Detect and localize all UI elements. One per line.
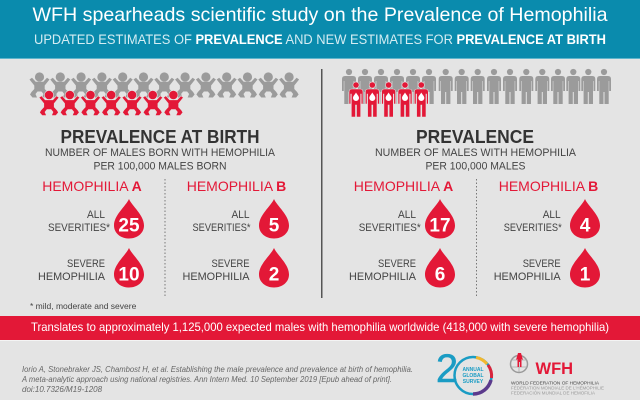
logo: WFH: FÉDÉRATION MONDIALE DE L'HÉMOPHILIE [511,384,604,392]
drop: 1 [570,248,600,288]
icons: people row [342,69,611,117]
icons: babies row [30,72,299,116]
red banner: Translates to approximately 1,125,000 expected males with hemophilia worldwide (418,000 with severe hemophilia) [31,320,609,334]
drop: 25 [114,199,144,238]
logo: WFH: WORLD FEDERATION OF HEMOPHILIA [511,380,600,386]
subtitle: UPDATED ESTIMATES OF PREVALENCE AND NEW ESTIMATES FOR PREVALENCE AT BIRTH [34,32,606,47]
header band [0,0,640,59]
logo: 20 annual global survey: ANNUAL [462,367,484,373]
title: WFH spearheads scientific study on the Prevalence of Hemophilia [32,4,608,26]
drop: 25: 25 [118,216,140,236]
heading: hemophilia B: HEMOPHILIA B [499,178,598,194]
labels: hemophilia B: SEVERE [523,258,561,270]
heading: prevalence: PREVALENCE [416,126,534,147]
citation: Iorio A, Stonebraker JS, Chambost H, et al. Establishing the male prevalence and prevalence at birth of hemophilia. [22,365,413,374]
citation: A meta-analytic approach using national registries. Ann Intern Med. 10 September 2019 [Epub ahead of print]. [21,375,392,384]
drop: 17: 17 [429,216,451,236]
labels: hemophilia A [349,209,421,283]
panel: prevalence at birth [38,126,289,297]
labels: hemophilia A: SEVERITIES* [48,222,111,234]
description: prevalence: NUMBER OF MALES WITH HEMOPHILIA [375,147,577,159]
sub-divider [476,179,478,297]
center divider [321,69,322,298]
heading: hemophilia A: HEMOPHILIA A [354,178,453,194]
description: prevalence [375,147,577,172]
drop: 10: 10 [118,264,140,286]
labels: hemophilia A: SEVERE [67,258,105,270]
labels: hemophilia B: HEMOPHILIA [182,271,250,283]
footnote: * mild, moderate and severe [30,301,137,311]
labels: hemophilia B: SEVERITIES* [192,222,251,234]
labels: hemophilia B [182,209,251,283]
logo: WFH: FEDERACIÓN MUNDIAL DE HEMOFILIA [511,390,596,396]
citation: doi:10.7326/M19-1208 [22,385,103,394]
citation [21,365,413,394]
labels: hemophilia A: HEMOPHILIA [38,271,105,283]
labels: hemophilia B: ALL [543,209,561,221]
labels: hemophilia B: SEVERE [212,258,250,270]
drop: 1: 1 [580,264,591,286]
labels: hemophilia B [494,209,562,283]
drop: 2 [259,248,289,288]
labels: hemophilia A: SEVERE [378,258,416,270]
logo: 20 annual global survey [436,347,492,394]
description: prevalence at birth: PER 100,000 MALES BORN [94,160,227,172]
drop: 2: 2 [269,264,279,286]
drop: 4 [570,199,600,238]
logo: 20 annual global survey: 2 [436,347,458,391]
drop: 5 [259,199,289,238]
sub-divider [164,179,166,297]
logo: 20 annual global survey: GLOBAL [462,373,484,379]
logo: 20 annual global survey: SURVEY [463,379,484,385]
drop: 5: 5 [269,216,280,236]
logo: WFH: WFH [536,360,573,378]
labels: hemophilia A: ALL [398,209,416,221]
description: prevalence: PER 100,000 MALES [426,160,526,172]
drop: 6 [425,248,455,288]
labels: hemophilia B: SEVERITIES* [504,222,562,234]
description: prevalence at birth [45,147,276,172]
heading: hemophilia A: HEMOPHILIA A [42,178,142,194]
description: prevalence at birth: NUMBER OF MALES BORN WITH HEMOPHILIA [45,147,276,159]
drop: 10 [114,248,144,288]
labels: hemophilia A: ALL [87,209,105,221]
labels: hemophilia B: ALL [232,209,250,221]
drop: 4: 4 [580,216,591,236]
logo: WFH [510,353,604,396]
labels: hemophilia B: HEMOPHILIA [494,271,561,283]
heading: hemophilia B: HEMOPHILIA B [187,178,286,194]
drop: 17 [425,199,455,238]
heading: prevalence at birth: PREVALENCE AT BIRTH [60,126,260,147]
red banner [0,316,640,341]
panel: prevalence [349,126,600,297]
labels: hemophilia A: SEVERITIES* [359,222,421,234]
labels: hemophilia A: HEMOPHILIA [349,271,416,283]
drop: 6: 6 [435,264,445,286]
labels: hemophilia A [38,209,111,283]
